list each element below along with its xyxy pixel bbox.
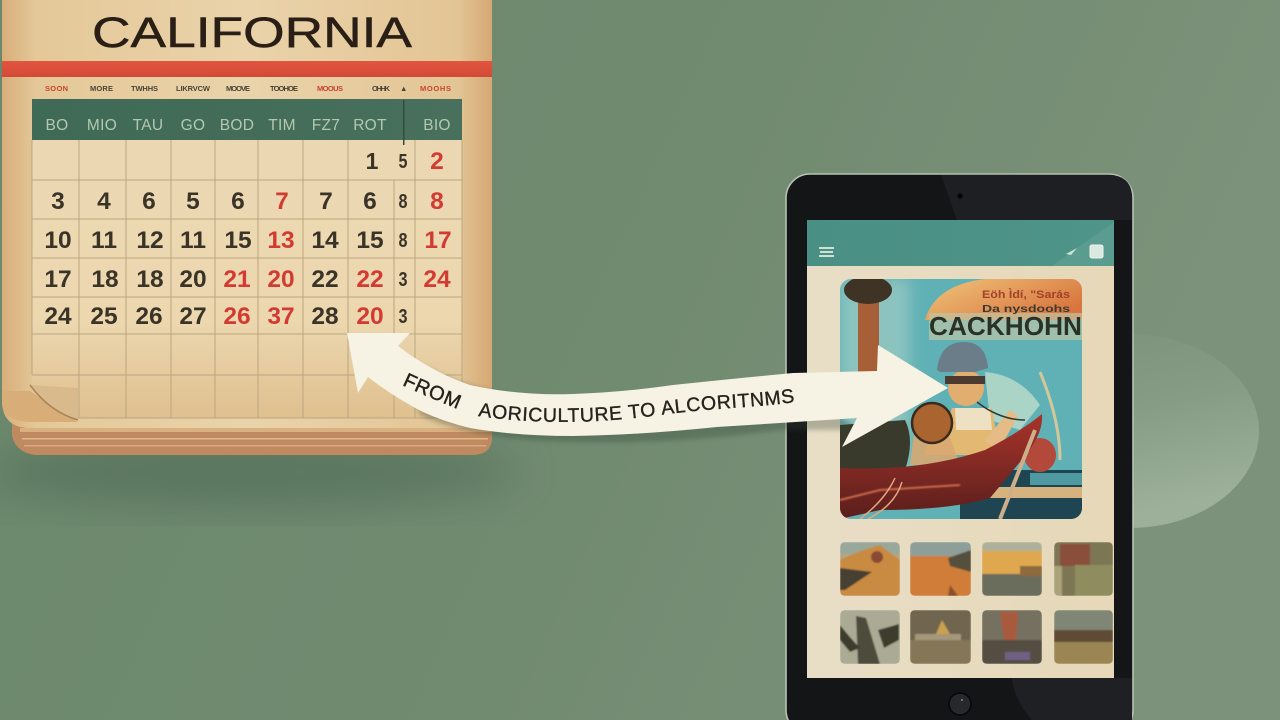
date numbers: 3 bbox=[398, 306, 408, 328]
title band bbox=[929, 313, 1082, 340]
date numbers: 12 bbox=[136, 227, 164, 254]
square icon bbox=[1090, 245, 1103, 258]
camera bbox=[958, 194, 962, 198]
date numbers: 7 bbox=[319, 188, 333, 215]
date numbers: 14 bbox=[311, 227, 339, 254]
date numbers: 8 bbox=[398, 230, 408, 252]
date numbers: 10 bbox=[44, 227, 72, 254]
decorative pale disc behind tablet bbox=[1001, 334, 1259, 528]
bezel reflection top bbox=[941, 175, 1132, 220]
thumbnail 2 bbox=[910, 542, 971, 596]
date numbers: 5 bbox=[186, 188, 200, 215]
small labels row bbox=[45, 84, 451, 93]
date numbers: 26 bbox=[223, 303, 251, 330]
home button bbox=[949, 693, 971, 715]
date numbers: 28 bbox=[311, 303, 339, 330]
bezel reflection bottom bbox=[1012, 678, 1132, 720]
paddle bbox=[1000, 430, 1035, 519]
arrow label end: AORICULTURE TO ALCORITNMS bbox=[478, 389, 794, 422]
date numbers: 13 bbox=[267, 227, 295, 254]
date numbers: 4 bbox=[97, 188, 111, 215]
app header bar bbox=[807, 220, 1114, 266]
weekday header bar: BOD bbox=[220, 117, 254, 134]
poster title: CACKHOHN bbox=[929, 311, 1082, 341]
thumbnail 4 bbox=[1054, 542, 1113, 596]
thumbnail 5 bbox=[840, 610, 900, 664]
date numbers: 24 bbox=[44, 303, 72, 330]
weekday header bar: MIO bbox=[87, 117, 117, 134]
date numbers: 17 bbox=[424, 227, 452, 254]
basket bbox=[1024, 438, 1056, 472]
weekday header bar: FZ7 bbox=[312, 117, 340, 134]
small labels row: MOOHS bbox=[420, 84, 451, 93]
thumbnail 1 bbox=[840, 542, 900, 596]
thumbnails bbox=[840, 542, 1113, 664]
title: CALIFORNIA bbox=[92, 9, 412, 57]
sun panel bbox=[925, 279, 1082, 320]
date numbers: 18 bbox=[91, 266, 119, 293]
date numbers: 25 bbox=[90, 303, 118, 330]
date numbers: 27 bbox=[179, 303, 207, 330]
small labels row: OHHK bbox=[372, 84, 391, 93]
small labels row: TOOHOE bbox=[270, 84, 298, 93]
date numbers: 37 bbox=[267, 303, 295, 330]
send icon bbox=[1066, 248, 1077, 255]
date numbers: 3 bbox=[51, 188, 65, 215]
date numbers: 7 bbox=[275, 188, 289, 215]
tablet screen bbox=[807, 220, 1114, 678]
weekday header bar: GO bbox=[181, 117, 205, 134]
arrow ribbon bbox=[347, 333, 948, 447]
small labels row: MOOUS bbox=[317, 84, 343, 93]
date numbers bbox=[44, 148, 452, 330]
date numbers: 20 bbox=[267, 266, 295, 293]
date numbers: 15 bbox=[356, 227, 384, 254]
boy figure bbox=[910, 342, 1040, 465]
poster small text: Eöh Ìdí, "Sarás bbox=[982, 288, 1070, 301]
date numbers: 1 bbox=[366, 148, 379, 174]
date numbers: 11 bbox=[91, 227, 117, 254]
thumbnail 3 bbox=[982, 542, 1042, 596]
small labels row: ▲ bbox=[400, 84, 407, 93]
rope on boat bbox=[860, 478, 902, 519]
small labels row: LIKRVCW bbox=[176, 84, 211, 93]
date numbers: 3 bbox=[398, 269, 408, 291]
date numbers: 17 bbox=[44, 266, 72, 293]
thumbnail 6 bbox=[910, 610, 971, 664]
weekday header bar: BO bbox=[46, 117, 68, 134]
thumbnail 7 bbox=[982, 610, 1042, 664]
date numbers: 26 bbox=[135, 303, 163, 330]
date numbers: 11 bbox=[180, 227, 206, 254]
date numbers: 24 bbox=[423, 266, 451, 293]
arrow shadow bbox=[398, 352, 860, 442]
date numbers: 21 bbox=[223, 266, 251, 293]
curled page corner bbox=[2, 385, 78, 422]
small labels row: TWHHS bbox=[131, 84, 158, 93]
poster artwork: Da nysdoohs bbox=[982, 304, 1071, 315]
red canoe bbox=[840, 414, 1042, 519]
calendar bbox=[2, 0, 492, 455]
date numbers: 20 bbox=[179, 266, 207, 293]
arrow label start: FROM bbox=[403, 372, 462, 409]
fishing reeds bbox=[1040, 372, 1060, 460]
weekday header bar: TIM bbox=[268, 117, 296, 134]
tree trunk bbox=[844, 279, 892, 372]
thumbnail 8 bbox=[1054, 610, 1113, 664]
date numbers: 8 bbox=[398, 191, 408, 213]
date numbers: 22 bbox=[311, 266, 339, 293]
calendar sheet bbox=[2, 0, 492, 428]
date numbers: 2 bbox=[430, 148, 444, 175]
calendar drop shadow bbox=[0, 438, 520, 506]
page stack bbox=[12, 420, 492, 455]
small labels row: MOOVE bbox=[226, 84, 250, 93]
weekday header bar: ROT bbox=[353, 117, 387, 134]
date numbers: 6 bbox=[142, 188, 156, 215]
date numbers: 20 bbox=[356, 303, 384, 330]
tablet body bbox=[786, 174, 1133, 720]
date numbers: 6 bbox=[231, 188, 245, 215]
poster artwork bbox=[840, 276, 1082, 519]
calendar grid lines bbox=[32, 140, 462, 418]
date numbers: 15 bbox=[224, 227, 252, 254]
red band bbox=[2, 61, 492, 77]
weekday header bar: TAU bbox=[133, 117, 163, 134]
grid background bbox=[32, 140, 462, 418]
sea and shore bbox=[960, 470, 1082, 519]
date numbers: 6 bbox=[363, 188, 377, 215]
date numbers: 5 bbox=[398, 151, 408, 173]
weekday header bar: BIO bbox=[423, 117, 451, 134]
date numbers: 8 bbox=[430, 188, 444, 215]
small labels row: MORE bbox=[90, 84, 113, 93]
curved double-headed arrow bbox=[347, 333, 948, 447]
date numbers: 18 bbox=[136, 266, 164, 293]
tablet bbox=[786, 174, 1133, 720]
menu icon bbox=[819, 247, 834, 257]
date numbers: 22 bbox=[356, 266, 384, 293]
dark foliage bbox=[840, 420, 910, 469]
small labels row: SOON bbox=[45, 84, 68, 93]
weekday header bar bbox=[32, 99, 462, 145]
